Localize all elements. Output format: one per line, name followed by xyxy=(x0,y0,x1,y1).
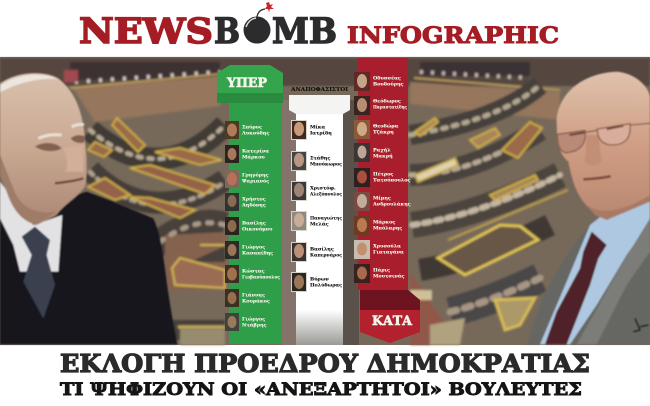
row: Στάθης Μπούκωρος: Στάθης xyxy=(310,154,330,162)
row: Χρυσούλα Γιαταγάνα xyxy=(354,240,404,259)
ear and neck shade xyxy=(0,155,57,225)
row: Οδυσσέας Βουδούρης: Βουδούρης xyxy=(373,80,404,88)
row: Σπύρος Λυκούδης xyxy=(225,121,269,139)
row: Θεόδωρος Παραστατίδης: Παραστατίδης xyxy=(373,104,407,110)
head xyxy=(557,72,650,216)
row: Γρηγόρης Ψαριανός xyxy=(225,170,269,188)
row: Ραχήλ Μακρή: Μακρή xyxy=(373,152,393,160)
logo word INFOGRAPHIC: INFOGRAPHIC xyxy=(347,23,559,49)
row: Γιάννης Κουράκος xyxy=(225,289,270,307)
row: Βύρων Πολύδωρας: Πολύδωρας xyxy=(310,282,342,288)
row: Ραχήλ Μακρή: Ραχήλ xyxy=(373,146,391,154)
row: Βύρων Πολύδωρας xyxy=(291,272,342,292)
head xyxy=(0,73,87,225)
row: Σπύρος Λυκούδης: Σπύρος xyxy=(242,124,262,130)
nose xyxy=(585,135,602,165)
panel: undecided column shadow xyxy=(282,100,297,345)
row: Χριστόφ. Αλεξόπουλος xyxy=(291,181,342,201)
lapel highlight xyxy=(577,218,650,344)
right benches xyxy=(502,122,542,158)
panel: against (red column) xyxy=(354,58,420,343)
row: Θεοδώρα Τζάκρη: Θεοδώρα xyxy=(373,122,399,130)
row: Χρυσούλα Γιαταγάνα: Γιαταγάνα xyxy=(373,248,404,256)
row: Θεόδωρος Παραστατίδης xyxy=(354,96,407,115)
suit xyxy=(527,198,650,344)
header logo xyxy=(79,2,559,52)
row: Γιάννης Κουράκος: Κουράκος xyxy=(242,298,270,304)
glasses frame xyxy=(557,123,650,153)
row: Θεοδώρα Τζάκρη: Τζάκρη xyxy=(373,128,394,136)
nose xyxy=(63,145,83,172)
row: Οδυσσέας Βουδούρης xyxy=(354,72,404,91)
lens right xyxy=(597,124,630,145)
row: Κώστας Γιοβανόπουλος: Κώστας xyxy=(242,268,265,274)
row: Πάρις Μουτσινάς xyxy=(354,264,404,283)
row: Μάρκος Μπόλαρης: Μπόλαρης xyxy=(373,224,402,232)
row: Χρήστος Αηδόνης: Χρήστος xyxy=(242,196,266,202)
row: Θεόδωρος Παραστατίδης: Θεόδωρος xyxy=(373,98,401,104)
shirt xyxy=(0,182,62,272)
row: Γιώργος Ντάβρης xyxy=(225,313,267,331)
shirt xyxy=(540,198,650,344)
mouth xyxy=(55,178,83,183)
right seat rows xyxy=(410,85,540,135)
in favour heading: ΥΠΕΡ xyxy=(226,76,267,91)
suit xyxy=(0,192,177,344)
photo: right man with glasses xyxy=(527,72,650,344)
right people rows xyxy=(410,85,540,135)
left benches xyxy=(112,118,145,152)
brows and eye xyxy=(569,126,623,135)
row: Βασίλης Καπερνάρος xyxy=(291,242,342,262)
panel: in favour (green column) xyxy=(217,65,283,344)
row: Βασίλης Οικονόμου xyxy=(225,217,273,235)
row: Στάθης Μπούκωρος: Μπούκωρος xyxy=(310,160,342,168)
neck shade xyxy=(587,195,650,220)
against banner xyxy=(360,310,420,343)
row: Πέτρος Τατσόπουλος: Πέτρος xyxy=(373,170,393,178)
row: Κώστας Γιοβανόπουλος xyxy=(225,265,280,283)
photo: left man in dark suit xyxy=(0,73,177,344)
pocket square mark xyxy=(633,318,648,332)
row: Χριστόφ. Αλεξόπουλος: Χριστόφ. xyxy=(310,184,336,192)
row: Ραχήλ Μακρή xyxy=(354,143,393,162)
row: Γρηγόρης Ψαριανός: Γρηγόρης xyxy=(242,172,269,178)
against heading: ΚΑΤΑ xyxy=(372,314,413,329)
row: Κατερίνα Μάρκου xyxy=(225,145,269,163)
row: Μίμης Ανδρουλάκης xyxy=(354,192,411,211)
row: Σπύρος Λυκούδης: Λυκούδης xyxy=(241,130,269,136)
row: Γιώργος Κασαπίδης xyxy=(225,241,273,259)
row: Πέτρος Τατσόπουλος xyxy=(354,168,410,187)
undecided heading: ΑΝΑΠΟΦΑΣΙΣΤΟΙ xyxy=(290,87,348,93)
row: Στάθης Μπούκωρος xyxy=(291,151,342,171)
row: Μίκα Ιατρίδη: Μίκα xyxy=(310,124,325,130)
row: Βασίλης Οικονόμου: Οικονόμου xyxy=(242,226,273,232)
icon: bomb letter O: O xyxy=(243,11,271,52)
row: Βασίλης Καπερνάρος: Βασίλης xyxy=(310,246,334,252)
parliament background photo xyxy=(0,57,650,345)
row: Γιάννης Κουράκος: Γιάννης xyxy=(242,292,265,298)
row: Γιώργος Κασαπίδης: Γιώργος xyxy=(242,244,265,250)
row: Παναγιώτης Μελάς xyxy=(291,211,342,231)
row: Μάρκος Μπόλαρης: Μάρκος xyxy=(373,218,395,226)
row: Πέτρος Τατσόπουλος: Τατσόπουλος xyxy=(373,176,410,184)
row: Πάρις Μουτσινάς: Μουτσινάς xyxy=(373,272,404,280)
row: Παναγιώτης Μελάς: Παναγιώτης xyxy=(310,214,342,222)
row: Πάρις Μουτσινάς: Πάρις xyxy=(373,266,390,274)
row: Παναγιώτης Μελάς: Μελάς xyxy=(310,220,329,228)
lens left xyxy=(557,130,585,153)
row: Χριστόφ. Αλεξόπουλος: Αλεξόπουλος xyxy=(309,190,342,198)
undecided banner xyxy=(289,95,350,114)
tie xyxy=(22,227,55,318)
against lower fold xyxy=(360,290,420,310)
row: Γιώργος Ντάβρης: Ντάβρης xyxy=(242,322,267,328)
row: Κώστας Γιοβανόπουλος: Γιοβανόπουλος xyxy=(242,274,280,280)
row: Γιώργος Κασαπίδης: Κασαπίδης xyxy=(242,250,273,256)
left people rows xyxy=(90,125,225,159)
row: Βασίλης Καπερνάρος: Καπερνάρος xyxy=(310,252,342,258)
white hair xyxy=(0,75,57,92)
logo letters MB: MB xyxy=(272,11,337,52)
left seat rows xyxy=(90,125,225,159)
row: Μίμης Ανδρουλάκης: Ανδρουλάκης xyxy=(372,200,411,208)
row: Χρήστος Αηδόνης: Αηδόνης xyxy=(241,202,266,208)
logo letter B: B xyxy=(214,11,240,52)
tie xyxy=(545,232,607,344)
mouth xyxy=(583,176,611,179)
row: Βασίλης Οικονόμου: Βασίλης xyxy=(242,220,266,226)
row: Χρήστος Αηδόνης xyxy=(225,193,266,211)
row: Οδυσσέας Βουδούρης: Οδυσσέας xyxy=(373,74,401,82)
row: Μάρκος Μπόλαρης xyxy=(354,216,402,235)
bottom title line 1: ΕΚΛΟΓΗ ΠΡΟΕΔΡΟΥ ΔΗΜΟΚΡΑΤΙΑΣ xyxy=(60,349,590,378)
row: Κατερίνα Μάρκου: Κατερίνα xyxy=(242,148,269,154)
logo word NEWS: NEWS xyxy=(79,11,213,52)
row: Χρυσούλα Γιαταγάνα: Χρυσούλα xyxy=(373,242,401,250)
row: Γιώργος Ντάβρης: Γιώργος xyxy=(242,316,265,322)
eyebrows xyxy=(38,124,84,138)
bottom title line 2: ΤΙ ΨΗΦΙΖΟΥΝ ΟΙ «ΑΝΕΞΑΡΤΗΤΟΙ» ΒΟΥΛΕΥΤΕΣ xyxy=(60,380,582,400)
row: Μίκα Ιατρίδη: Ιατρίδη xyxy=(310,130,332,136)
panel: undecided (white column) xyxy=(289,87,350,345)
row: Βύρων Πολύδωρας: Βύρων xyxy=(310,276,329,282)
in favour banner xyxy=(217,65,283,93)
row: Κατερίνα Μάρκου: Μάρκου xyxy=(242,154,265,160)
row: Γρηγόρης Ψαριανός: Ψαριανός xyxy=(242,178,269,184)
eyes xyxy=(35,143,62,151)
row: Μίμης Ανδρουλάκης: Μίμης xyxy=(373,194,391,202)
row: Θεοδώρα Τζάκρη xyxy=(354,120,399,139)
row: Μίκα Ιατρίδη xyxy=(291,120,332,140)
